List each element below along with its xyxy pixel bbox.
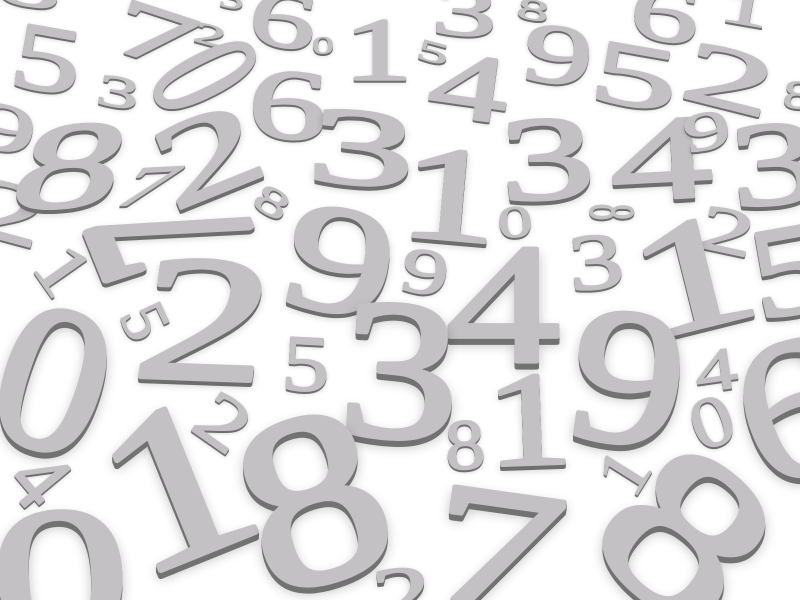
digit 8 small: 8	[246, 174, 298, 230]
digit 5 small: 5	[413, 32, 453, 72]
digit 0 small right: 0	[679, 378, 746, 467]
digit 3 small: 3	[93, 63, 143, 120]
digit 2 small right: 2	[693, 189, 762, 272]
digit 4: 4	[422, 30, 516, 144]
digit 5 rotated small: 5	[105, 291, 184, 351]
digit 2: 2	[133, 73, 282, 236]
digit 7 on its side: 7	[33, 166, 303, 305]
digit 5 small lower: 5	[280, 318, 332, 409]
digit 1 centre: 1	[394, 115, 506, 273]
digit 9 small centre: 9	[395, 232, 455, 311]
digit 0 small centre: 0	[495, 196, 535, 248]
digit 1 lower centre: 1	[483, 343, 575, 495]
digit 0: 0	[116, 12, 296, 137]
digit 8 small lower: 8	[443, 404, 487, 486]
digit 0 tiny: 0	[312, 31, 334, 59]
digit 6 centre: 6	[243, 46, 333, 163]
digit 5: 5	[4, 0, 91, 116]
digit 1 right large: 1	[611, 174, 775, 375]
digit 4 small right: 4	[690, 333, 742, 405]
digit 4 large: 4	[445, 208, 561, 399]
digit 1 small left: 1	[17, 229, 109, 311]
digit 9 small: 9	[678, 97, 736, 165]
digit 9 large: 9	[268, 165, 412, 356]
digit 2 large: 2	[124, 217, 287, 420]
digit 8 sideways small: 8	[575, 204, 647, 220]
digit 1 small rotated: 1	[580, 435, 667, 508]
digit 4 right: 4	[606, 90, 716, 228]
digit 3 large: 3	[334, 256, 466, 483]
digit 9 large right: 9	[556, 263, 700, 492]
digit 2 right: 2	[672, 21, 786, 137]
digit 5 right: 5	[583, 19, 687, 133]
digit 9: 9	[517, 4, 599, 107]
digit 3 right: 3	[496, 90, 598, 227]
digit 2 small: 2	[190, 15, 230, 55]
digit 8: 8	[0, 94, 146, 237]
digit 3 centre: 3	[303, 82, 421, 213]
digit 3 small right: 3	[565, 215, 627, 308]
digit 1: 1	[343, 0, 413, 100]
digit 2 small lower: 2	[179, 374, 267, 471]
digit 7 small: 7	[99, 152, 197, 219]
